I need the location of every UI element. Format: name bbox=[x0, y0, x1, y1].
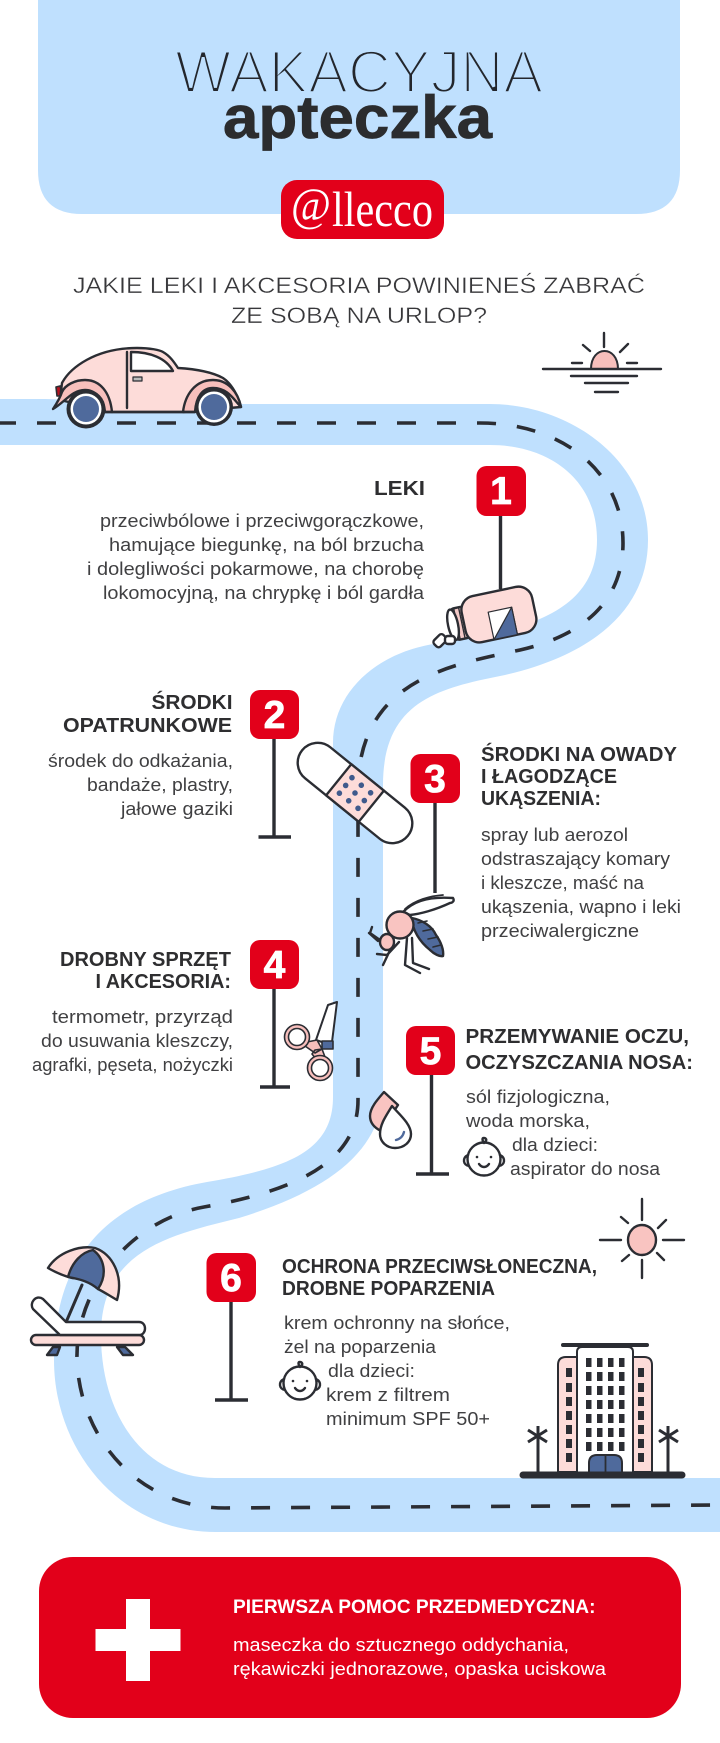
heading: srodki na owady bbox=[481, 742, 677, 810]
description: drobny sprzet: agrafki, pęseta, nożyczki bbox=[32, 1055, 233, 1075]
description: srodki na owady bbox=[481, 825, 681, 941]
icon: car bbox=[53, 348, 241, 428]
heading: first aid: PIERWSZA POMOC PRZEDMEDYCZNA: bbox=[233, 1596, 596, 1618]
heading: srodki opatrunkowe: ŚRODKI bbox=[152, 690, 232, 714]
badge 6 bbox=[206, 1253, 256, 1400]
description: leki bbox=[87, 511, 425, 603]
description: drobny sprzet: do usuwania kleszczy, bbox=[41, 1031, 233, 1051]
heading: srodki na owady: UKĄSZENIA: bbox=[481, 787, 601, 810]
heading: srodki na owady: ŚRODKI NA OWADY bbox=[481, 742, 677, 766]
heading: srodki opatrunkowe: OPATRUNKOWE bbox=[63, 714, 232, 737]
description: ochrona przeciwsloneczna bbox=[284, 1313, 510, 1429]
icon: drops bbox=[370, 1092, 411, 1148]
description: przemywanie oczu: sól fizjologiczna, bbox=[466, 1087, 610, 1107]
heading: drobny sprzet bbox=[60, 948, 231, 993]
description: leki: przeciwbólowe i przeciwgorączkowe, bbox=[100, 511, 424, 531]
heading: srodki na owady: I ŁAGODZĄCE bbox=[481, 765, 617, 788]
badge 6: 6 bbox=[220, 1257, 242, 1300]
badge 5 bbox=[406, 1026, 455, 1174]
title: WAKACYJNA bbox=[175, 38, 543, 106]
step 5: przemywanie oczu bbox=[370, 1025, 693, 1179]
badge 5: 5 bbox=[420, 1030, 441, 1073]
icon: hotel with palm trees bbox=[523, 1345, 682, 1475]
step 3: srodki na owady bbox=[369, 742, 681, 973]
description: leki: i dolegliwości pokarmowe, na chorobę bbox=[87, 559, 424, 579]
badge 1: 1 bbox=[490, 470, 512, 513]
description: ochrona przeciwsloneczna: krem z filtrem bbox=[326, 1385, 450, 1405]
description: drobny sprzet: termometr, przyrząd bbox=[52, 1007, 233, 1027]
description: srodki na owady: przeciwalergiczne bbox=[481, 921, 639, 941]
icon: sun bbox=[600, 1199, 684, 1278]
description: srodki na owady: spray lub aerozol bbox=[481, 825, 628, 845]
heading: przemywanie oczu: OCZYSZCZANIA NOSA: bbox=[466, 1051, 693, 1074]
heading: srodki opatrunkowe bbox=[63, 690, 232, 737]
description: srodki opatrunkowe: środek do odkażania, bbox=[48, 751, 233, 771]
subtitle question bbox=[73, 273, 645, 328]
logo: allecco: @ bbox=[291, 179, 331, 231]
icon: pills bbox=[432, 633, 455, 648]
panel: first aid bbox=[39, 1557, 681, 1718]
description: przemywanie oczu bbox=[465, 1087, 661, 1179]
description: srodki na owady: i kleszcze, maść na bbox=[481, 873, 645, 893]
badge 2 bbox=[250, 690, 299, 837]
icon: baby face bbox=[464, 1138, 504, 1176]
description: srodki opatrunkowe: jałowe gaziki bbox=[120, 799, 233, 819]
description: srodki opatrunkowe: bandaże, plastry, bbox=[87, 775, 233, 795]
description: przemywanie oczu: dla dzieci: bbox=[512, 1135, 598, 1155]
badge 3 bbox=[410, 754, 460, 893]
subtitle question: ZE SOBĄ NA URLOP? bbox=[231, 303, 487, 328]
icon: white cross bbox=[96, 1599, 180, 1681]
subtitle question: JAKIE LEKI I AKCESORIA POWINIENEŚ ZABRAĆ bbox=[73, 273, 645, 298]
description: first aid: maseczka do sztucznego oddychania, bbox=[233, 1635, 569, 1655]
description: przemywanie oczu: aspirator do nosa bbox=[510, 1159, 661, 1179]
heading: przemywanie oczu: PRZEMYWANIE OCZU, bbox=[466, 1025, 689, 1048]
heading: drobny sprzet: I AKCESORIA: bbox=[96, 970, 231, 993]
heading: przemywanie oczu bbox=[466, 1025, 693, 1074]
step 2: srodki opatrunkowe bbox=[48, 690, 420, 851]
description: leki: lokomocyjną, na chrypkę i ból gardła bbox=[103, 583, 425, 603]
icon: beach umbrella and lounger bbox=[31, 1247, 145, 1355]
icon: scissors bbox=[286, 1002, 337, 1078]
heading: leki: LEKI bbox=[374, 477, 425, 500]
description: leki: hamujące biegunkę, na ból brzucha bbox=[109, 535, 425, 555]
icon: plaster bbox=[290, 735, 420, 851]
description: ochrona przeciwsloneczna: minimum SPF 50+ bbox=[326, 1409, 490, 1429]
logo: allecco bbox=[281, 179, 444, 239]
title: apteczka bbox=[223, 84, 493, 151]
description: przemywanie oczu: woda morska, bbox=[465, 1111, 590, 1131]
icon: pill bottle bbox=[443, 584, 539, 648]
description: ochrona przeciwsloneczna: dla dzieci: bbox=[328, 1361, 415, 1381]
header panel bbox=[38, 0, 680, 214]
heading: ochrona przeciwsloneczna bbox=[282, 1255, 597, 1300]
badge 4: 4 bbox=[264, 944, 286, 987]
icon: mosquito bbox=[369, 895, 454, 973]
icon: sunset bbox=[543, 333, 661, 392]
title bbox=[175, 38, 543, 151]
step 1: leki bbox=[87, 466, 539, 648]
icon: baby face bbox=[280, 1362, 320, 1400]
road bbox=[0, 399, 720, 1532]
description: first aid bbox=[233, 1635, 607, 1679]
badge 1 bbox=[476, 466, 526, 589]
road centre dashes bbox=[0, 423, 720, 1508]
badge 3: 3 bbox=[424, 758, 446, 801]
description: drobny sprzet bbox=[32, 1007, 233, 1075]
description: ochrona przeciwsloneczna: krem ochronny na słońce, bbox=[284, 1313, 510, 1333]
step 6: ochrona przeciwsloneczna bbox=[206, 1253, 597, 1429]
description: srodki opatrunkowe bbox=[48, 751, 233, 819]
heading: drobny sprzet: DROBNY SPRZĘT bbox=[60, 948, 231, 971]
logo: allecco: llecco bbox=[332, 181, 433, 237]
step 4: drobny sprzet bbox=[32, 940, 337, 1087]
heading: ochrona przeciwsloneczna: DROBNE POPARZENIA bbox=[282, 1277, 495, 1300]
heading: ochrona przeciwsloneczna: OCHRONA PRZECIWSŁONECZNA, bbox=[282, 1255, 597, 1278]
description: srodki na owady: ukąszenia, wapno i leki bbox=[481, 897, 681, 917]
description: first aid: rękawiczki jednorazowe, opaska uciskowa bbox=[233, 1659, 607, 1679]
badge 2: 2 bbox=[264, 694, 285, 737]
description: srodki na owady: odstraszający komary bbox=[481, 849, 670, 869]
description: ochrona przeciwsloneczna: żel na poparzenia bbox=[284, 1337, 437, 1357]
badge 4 bbox=[250, 940, 299, 1087]
